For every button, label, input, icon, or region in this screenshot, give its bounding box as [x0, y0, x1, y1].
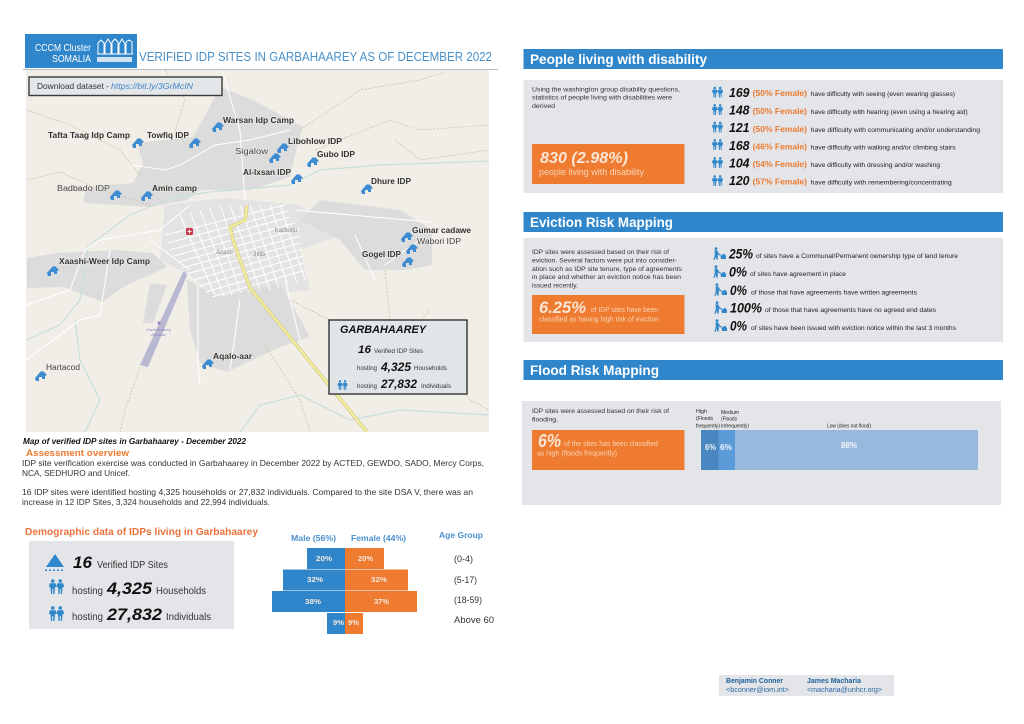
- disability statistics list: 168: [729, 138, 750, 153]
- text block: eviction intro: [532, 249, 683, 290]
- text block: eviction intro: in place and whether an eviction notice has been: [532, 274, 681, 281]
- site name labels: [46, 116, 472, 372]
- site name labels: Al-Ixsan IDP: [243, 168, 292, 177]
- site name labels: Gumar cadawe: [412, 226, 472, 235]
- site name labels: Towfiq IDP: [147, 131, 190, 140]
- disability statistics list: (54% Female): [753, 160, 807, 169]
- disability statistics list: 169: [729, 85, 750, 100]
- callout: 6.25% high risk of eviction: 6.25%: [539, 298, 586, 317]
- site name labels: Hartacod: [46, 363, 80, 372]
- heading: assessment overview: Assessment overview: [26, 448, 130, 459]
- disability statistics list: (50% Female): [753, 89, 807, 98]
- map info box: Garbahaarey: [329, 320, 467, 394]
- eviction statistics list: 0%: [730, 318, 747, 334]
- callout: 6.25% high risk of eviction: of IDP sites have been: [591, 307, 658, 314]
- population pyramid chart: Age Group: [439, 530, 483, 540]
- panel: flood risk mapping: [522, 401, 1001, 505]
- stacked bar chart: flood risk: (Floods: [721, 416, 737, 422]
- map info box: Garbahaarey: Individuals: [421, 384, 451, 390]
- map info box: Garbahaarey: 27,832: [380, 377, 417, 391]
- population pyramid chart: (5-17): [454, 575, 477, 585]
- contacts footer: <macharia@unhcr.org>: [807, 687, 882, 694]
- population pyramid chart: 20%: [316, 556, 333, 563]
- section header: flood risk mapping: [524, 360, 1003, 380]
- population pyramid chart: 32%: [307, 577, 324, 584]
- site name labels: Sigalow: [235, 147, 268, 156]
- population pyramid chart: (0-4): [454, 554, 473, 564]
- icon: hospital marker: [186, 228, 193, 235]
- map info box: Garbahaarey: hosting: [357, 384, 377, 390]
- disability statistics list: have difficulty with walking and/or climbing stairs: [811, 144, 956, 152]
- disability statistics list: have difficulty with communicating and/or understanding: [811, 127, 980, 134]
- download dataset box: https://bit.ly/3GrMcIN: [111, 81, 194, 91]
- callout: 830 people living with disability: people living with disability: [539, 167, 644, 177]
- text block: eviction intro: issued recently.: [532, 282, 578, 290]
- site name labels: Xaashi-Weer Idp Camp: [59, 257, 150, 266]
- stacked bar chart: flood risk: [696, 409, 978, 470]
- stacked bar chart: flood risk: High: [696, 409, 707, 415]
- map info box: Garbahaarey: Verified IDP Sites: [374, 349, 423, 355]
- map of IDP sites: [26, 70, 489, 432]
- stacked bar chart: flood risk: (Floods: [696, 416, 713, 422]
- title underline: [23, 69, 498, 70]
- text block: assessment overview: IDP site verification exercise was conducted in Garbahaarey in December 2022 by ACTED, GEWDO, SADO, Mercy Corps,: [22, 458, 484, 468]
- site name labels: Tafta Taag Idp Camp: [48, 131, 130, 140]
- population pyramid chart: 9%: [348, 620, 360, 627]
- disability statistics list: [712, 85, 980, 188]
- download dataset box: [29, 77, 222, 96]
- population pyramid chart: 32%: [371, 577, 388, 584]
- map info box: Garbahaarey: 16: [358, 344, 372, 356]
- callout: 6% high flood risk: of the sites has been classified: [564, 441, 658, 448]
- disability statistics list: (50% Female): [753, 125, 807, 134]
- site name labels: Warsan Idp Camp: [223, 116, 294, 125]
- stacked bar chart: flood risk: 6%: [705, 443, 716, 452]
- disability statistics list: (57% Female): [753, 178, 807, 186]
- download dataset box: Download dataset -: [37, 81, 109, 91]
- logo: CCCM Cluster Somalia: CCCM Cluster: [35, 43, 92, 54]
- panel: demographic summary: hosting: [72, 612, 103, 623]
- population pyramid chart: (18-59): [454, 595, 482, 605]
- map info box: Garbahaarey: hosting: [357, 366, 377, 372]
- map info box: Garbahaarey: Households: [414, 366, 447, 372]
- site name labels: Amin camp: [152, 184, 197, 193]
- text block: flood intro: IDP sites were assessed based on their risk of: [532, 408, 669, 415]
- site name labels: Gubo IDP: [317, 150, 356, 159]
- panel: demographic summary: [29, 541, 234, 629]
- population pyramid chart: 20%: [358, 556, 374, 563]
- site name labels: Badbado IDP: [57, 184, 110, 193]
- callout: 6.25% high risk of eviction: [532, 295, 684, 334]
- population pyramid chart: 37%: [374, 599, 390, 606]
- population pyramid chart: [272, 530, 494, 634]
- logo: CCCM Cluster Somalia: [25, 34, 137, 68]
- stacked bar chart: flood risk: frequently): [696, 424, 720, 430]
- eviction statistics list: 25%: [728, 246, 753, 262]
- text block: flood intro: [532, 408, 669, 424]
- stacked bar chart: flood risk: Low (does not flood): [827, 424, 871, 430]
- stacked bar chart: flood risk: Medium: [721, 410, 739, 416]
- town labels: [216, 228, 297, 258]
- contacts footer: <bconner@iom.int>: [726, 687, 789, 694]
- panel: demographic summary: Individuals: [166, 612, 211, 623]
- panel: eviction risk mapping: [524, 238, 1003, 342]
- text block: eviction intro: ation such as IDP site tenure, type of agreements: [532, 266, 683, 273]
- text block: assessment overview: [22, 458, 484, 507]
- eviction statistics list: 0%: [729, 264, 747, 280]
- icon: IDP site markers: [35, 122, 418, 381]
- text block: eviction intro: eviction. Several factors were put into consider-: [532, 258, 677, 264]
- town labels: Kacbodu: [275, 228, 297, 234]
- disability statistics list: have difficulty with remembering/concentrating: [811, 180, 952, 186]
- site name labels: Gogel IDP: [362, 250, 402, 259]
- disability statistics list: 120: [729, 173, 750, 188]
- callout: 6% high flood risk: [532, 430, 684, 470]
- eviction statistics list: [713, 246, 958, 334]
- eviction statistics list: of those that have agreements have no agreed end dates: [765, 307, 937, 314]
- text block: disability intro: statistics of people living with disabilities were: [532, 94, 672, 102]
- map info box: Garbahaarey: 4,325: [380, 360, 411, 374]
- text block: assessment overview: 16 IDP sites were identified hosting 4,325 households or 27,832 individuals. Compared to the site DSA V, there was an: [22, 487, 473, 497]
- panel: demographic summary: 27,832: [106, 605, 163, 624]
- text block: flood intro: flooding.: [532, 416, 558, 424]
- eviction statistics list: of those that have agreements have written agreements: [751, 290, 918, 296]
- stacked bar chart: flood risk: Infrequently): [721, 424, 749, 430]
- contacts footer: Benjamin Conner: [726, 678, 783, 685]
- map caption: Map of verified IDP sites in Garbahaarey - December 2022: [23, 437, 247, 446]
- section header: flood risk mapping: Flood Risk Mapping: [530, 362, 659, 378]
- population pyramid chart: Male (56%): [291, 533, 336, 543]
- section header: eviction risk mapping: Eviction Risk Mapping: [530, 214, 673, 230]
- panel: demographic summary: 16: [73, 553, 93, 572]
- disability statistics list: have difficulty with hearing (even using a hearing aid): [811, 109, 968, 116]
- section header: people living with disability: [524, 49, 1003, 69]
- disability statistics list: 104: [729, 156, 750, 170]
- text block: disability intro: derived: [532, 103, 555, 110]
- text block: assessment overview: NCA, SEDHURO and Unicef.: [22, 468, 130, 478]
- town labels: Acacc: [216, 250, 233, 256]
- text block: assessment overview: increase in 12 IDP Sites, 3,324 households and 22,994 individuals.: [22, 497, 270, 507]
- disability statistics list: (50% Female): [753, 107, 807, 116]
- callout: 830 people living with disability: [532, 144, 684, 184]
- population pyramid chart: Female (44%): [351, 533, 406, 543]
- site name labels: Wabori IDP: [417, 237, 461, 246]
- text block: eviction intro: IDP sites were assessed based on their risk of: [532, 249, 669, 256]
- text block: disability intro: [532, 86, 680, 110]
- disability statistics list: 148: [729, 102, 750, 118]
- title: VERIFIED IDP SITES IN GARBAHAAREY AS OF DECEMBER 2022: [139, 50, 492, 64]
- airport label: Airbase: [151, 332, 167, 337]
- panel: demographic summary: Verified IDP Sites: [97, 560, 168, 571]
- panel: demographic summary: hosting: [72, 586, 103, 597]
- section header: eviction risk mapping: [524, 212, 1003, 232]
- disability statistics list: have difficulty with dressing and/or washing: [811, 162, 940, 169]
- site name labels: Dhure IDP: [371, 177, 412, 186]
- population pyramid chart: Above 60: [454, 615, 494, 625]
- eviction statistics list: 100%: [730, 300, 762, 316]
- contacts footer: [719, 675, 894, 696]
- heading: demographic data: Demographic data of IDPs living in Garbahaarey: [25, 526, 258, 538]
- callout: 830 people living with disability: 830 (2.98%): [540, 150, 628, 167]
- text block: disability intro: Using the washington group disability questions,: [532, 86, 680, 94]
- map info box: Garbahaarey: GARBAHAAREY: [340, 324, 428, 336]
- callout: 6.25% high risk of eviction: classified as having high risk of eviction: [539, 316, 659, 324]
- panel: demographic summary: Households: [156, 586, 206, 597]
- callout: 6% high flood risk: as high (floods frequently): [537, 450, 617, 458]
- population pyramid chart: 38%: [305, 599, 322, 606]
- site name labels: Aqalo-aar: [213, 352, 252, 361]
- eviction statistics list: of sites have agreement in place: [750, 271, 846, 278]
- callout: 6% high flood risk: 6%: [538, 431, 561, 451]
- stacked bar chart: flood risk: 6%: [720, 443, 732, 452]
- airport label: [146, 322, 171, 337]
- eviction statistics list: 0%: [730, 282, 747, 298]
- panel: demographic summary: 4,325: [106, 579, 153, 598]
- section header: people living with disability: People living with disability: [530, 51, 707, 67]
- site name labels: Libohlow IDP: [288, 137, 343, 146]
- disability statistics list: have difficulty with seeing (even wearing glasses): [811, 91, 955, 98]
- panel: people living with disability: [524, 80, 1003, 193]
- disability statistics list: 121: [729, 120, 750, 135]
- stacked bar chart: flood risk: 88%: [841, 441, 857, 450]
- eviction statistics list: of sites have a Communal/Permanent ownership type of land tenure: [756, 253, 958, 260]
- population pyramid chart: 9%: [333, 620, 345, 627]
- logo: CCCM Cluster Somalia: SOMALIA: [52, 54, 91, 65]
- contacts footer: James Macharia: [807, 678, 861, 685]
- icon: tent: [45, 554, 64, 571]
- airport label: Gurboharey: [146, 327, 171, 332]
- disability statistics list: (46% Female): [753, 142, 807, 152]
- town labels: Jilib: [253, 252, 266, 258]
- eviction statistics list: of sites have been issued with eviction notice within the last 3 months: [751, 325, 957, 332]
